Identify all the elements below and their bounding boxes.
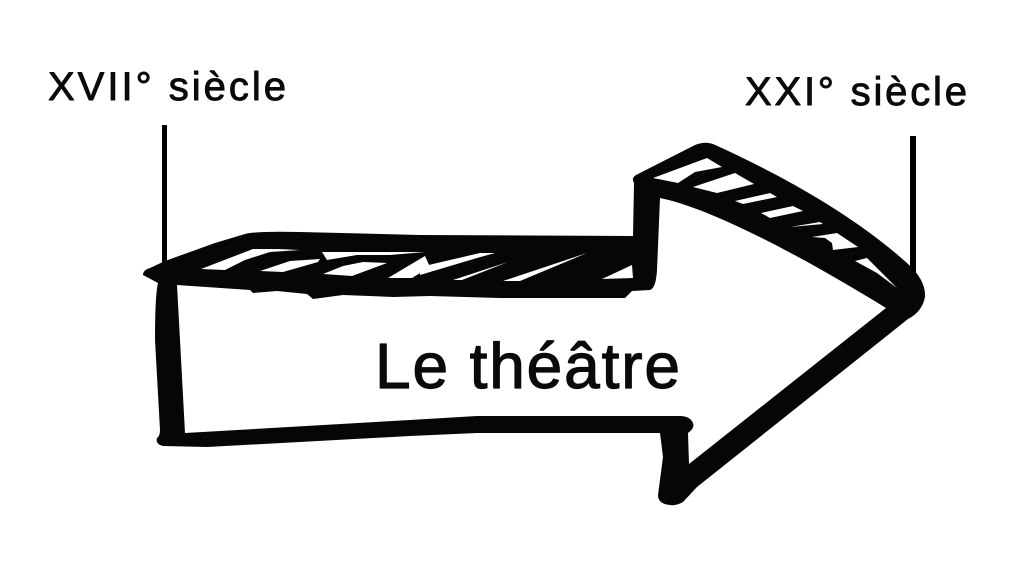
arrow interior [177,198,886,464]
arrow silhouette [143,143,925,505]
marker line: start [162,125,167,281]
label: XXI° siècle: XXI° siècle [745,70,967,114]
label: XVII° siècle: XVII° siècle [48,65,286,109]
title: Le théâtre: Le théâtre [375,330,680,402]
hatching on the top band [201,158,897,288]
marker line: end [910,136,916,290]
arrow [143,143,925,505]
